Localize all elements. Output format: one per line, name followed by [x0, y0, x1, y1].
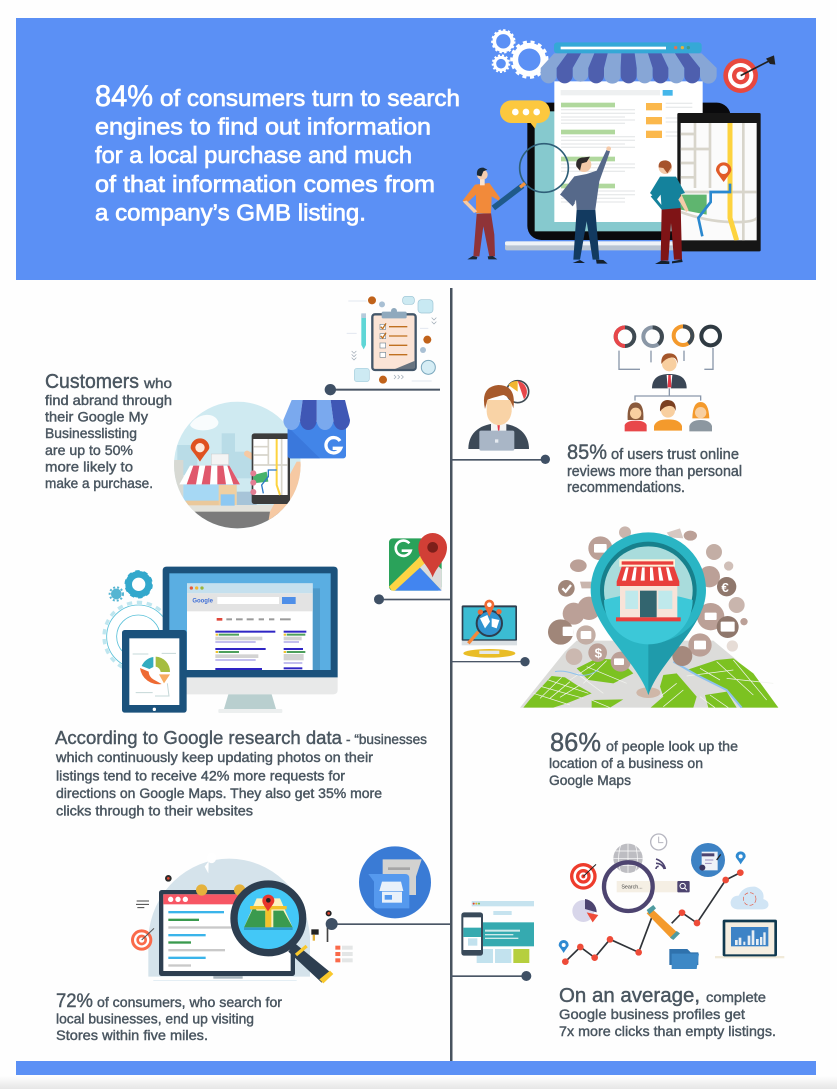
- search engine logo: Google: [192, 599, 214, 605]
- icon: small pins and list: [311, 910, 353, 962]
- panel: Google research statistic: [55, 533, 450, 818]
- icon: gears: [104, 572, 173, 671]
- timeline connector: [450, 971, 531, 981]
- magnifying glass: [493, 144, 568, 208]
- tablet with map: [677, 113, 761, 251]
- person: pointing at page: [560, 146, 611, 264]
- icon: laptop bar chart: [715, 920, 784, 958]
- text: 85% statistic: [567, 441, 742, 496]
- icon: search laptop and magnifier: [148, 852, 333, 983]
- text: Google research statistic: clicks through to their websites: [56, 804, 253, 818]
- header statement text: for a local purchase and much: [95, 142, 412, 168]
- text: customers statistic: their Google My: [45, 408, 148, 424]
- text: average profile statistic: Google business profiles get: [559, 1006, 745, 1022]
- line graph with red points: [562, 869, 744, 965]
- text: 72% statistic: Stores within five miles.: [56, 1027, 208, 1043]
- text: customers statistic: Businesslisting: [45, 425, 137, 441]
- desktop monitor with search results: [163, 567, 338, 713]
- text: 86% statistic: [549, 727, 738, 788]
- laptop: [505, 103, 731, 250]
- text: 72% statistic: of consumers, who search for: [97, 994, 282, 1010]
- icon: team hierarchy: [616, 326, 720, 431]
- header statement text: engines to find out information: [95, 114, 431, 140]
- tablet with donut chart: [122, 630, 187, 713]
- text: Google research statistic: which continuously keep updating photos on their: [55, 750, 374, 765]
- icon: map pins: [559, 851, 746, 953]
- panel: 85% statistic: [450, 326, 742, 496]
- text: customers statistic: more likely to: [45, 458, 133, 474]
- text: Google research statistic: - “businesses: [346, 732, 427, 747]
- header statement text: a company’s GMB listing.: [95, 200, 366, 226]
- text: 86% statistic: location of a business on: [549, 755, 703, 771]
- header statement text: 84%: [95, 80, 153, 113]
- icon: checklist clipboard: [347, 296, 436, 384]
- storefront awning: [541, 42, 717, 84]
- panel: header banner: [16, 18, 816, 280]
- icon: Google Maps: [389, 533, 447, 591]
- timeline connector: [450, 657, 530, 666]
- text: Google research statistic: directions on Google Maps. They also get 35% more: [56, 786, 382, 801]
- panel: 72% statistic: [56, 846, 450, 1043]
- text: 85% statistic: 85%: [567, 441, 607, 464]
- icon: globe on monitor: [462, 600, 517, 658]
- text: 85% statistic: of users trust online: [611, 447, 739, 463]
- icon: city map: [520, 641, 778, 708]
- web page with listings: [554, 81, 703, 222]
- text: 86% statistic: 86%: [550, 727, 601, 757]
- icon: cloud: [731, 887, 768, 909]
- icon: target: [131, 901, 154, 951]
- search label: Search...: [621, 884, 643, 890]
- icon: store circle: [359, 846, 431, 918]
- timeline connector: [326, 918, 450, 930]
- icon: bubble glyphs: €: [721, 580, 729, 595]
- icon: pie chart: [572, 899, 598, 922]
- text: customers statistic: [45, 371, 172, 491]
- text: 85% statistic: recommendations.: [567, 480, 685, 496]
- icon: clipboard circle: [691, 843, 725, 877]
- header statement text: [95, 80, 460, 226]
- header statement text: of consumers turn to search: [160, 85, 460, 111]
- text: average profile statistic: [559, 985, 776, 1039]
- timeline connector: [325, 384, 440, 395]
- icon: shop and phone circle: [174, 402, 301, 528]
- icon: Google My Business store: [283, 400, 350, 458]
- text: average profile statistic: On an average,: [559, 985, 700, 1007]
- panel: 86% statistic: [450, 526, 778, 788]
- icon: clock and signal: [651, 834, 667, 869]
- panel: average profile statistic: [450, 834, 784, 1039]
- text: Google research statistic: listings tend to receive 42% more requests for: [56, 768, 346, 784]
- text: 72% statistic: 72%: [56, 991, 93, 1012]
- text: customers statistic: who: [143, 375, 172, 391]
- panel: customers statistic: [45, 296, 440, 532]
- icon: gears: [492, 30, 547, 77]
- central vertical timeline: [450, 288, 452, 1062]
- timeline connector: [450, 455, 550, 464]
- icon: big teal map pin with store: [591, 532, 706, 695]
- icon: folder: [669, 949, 699, 969]
- text: customers statistic: are up to 50%: [45, 442, 133, 458]
- icon: floating brown bubbles: [548, 526, 748, 698]
- text: customers statistic: Customers: [45, 371, 139, 393]
- icon: speech bubble: [500, 100, 550, 129]
- timeline connector: [374, 594, 450, 604]
- icon: bubble glyphs: $: [595, 645, 603, 660]
- header illustration: storefront, laptop, map and people: [463, 30, 775, 264]
- text: Google research statistic: According to Google research data: [55, 727, 343, 748]
- icon: target with dart: [723, 55, 775, 93]
- bottom bar: [16, 1061, 816, 1075]
- text: average profile statistic: complete: [706, 989, 766, 1005]
- icon: bubble glyphs: [562, 544, 735, 665]
- icon: website on phone: [461, 901, 534, 963]
- person: teal shirt: [650, 160, 689, 264]
- icon: target: [570, 863, 597, 890]
- text: customers statistic: find abrand through: [45, 392, 172, 408]
- text: customers statistic: make a purchase.: [45, 475, 153, 491]
- text: 86% statistic: of people look up the: [606, 738, 738, 754]
- text: average profile statistic: 7x more clicks than empty listings.: [559, 1023, 776, 1039]
- text: Google research statistic: [55, 727, 427, 818]
- text: 85% statistic: reviews more than personal: [567, 464, 742, 480]
- person: orange shirt: [463, 168, 500, 259]
- icon: person with laptop and stopwatch: [468, 381, 529, 451]
- text: 72% statistic: local businesses, end up visiting: [56, 1010, 254, 1026]
- icon: search magnifier: [604, 862, 690, 940]
- text: 86% statistic: Google Maps: [549, 772, 631, 788]
- header statement text: of that information comes from: [95, 171, 435, 197]
- text: 72% statistic: [56, 991, 282, 1043]
- icon: globe: [613, 844, 643, 873]
